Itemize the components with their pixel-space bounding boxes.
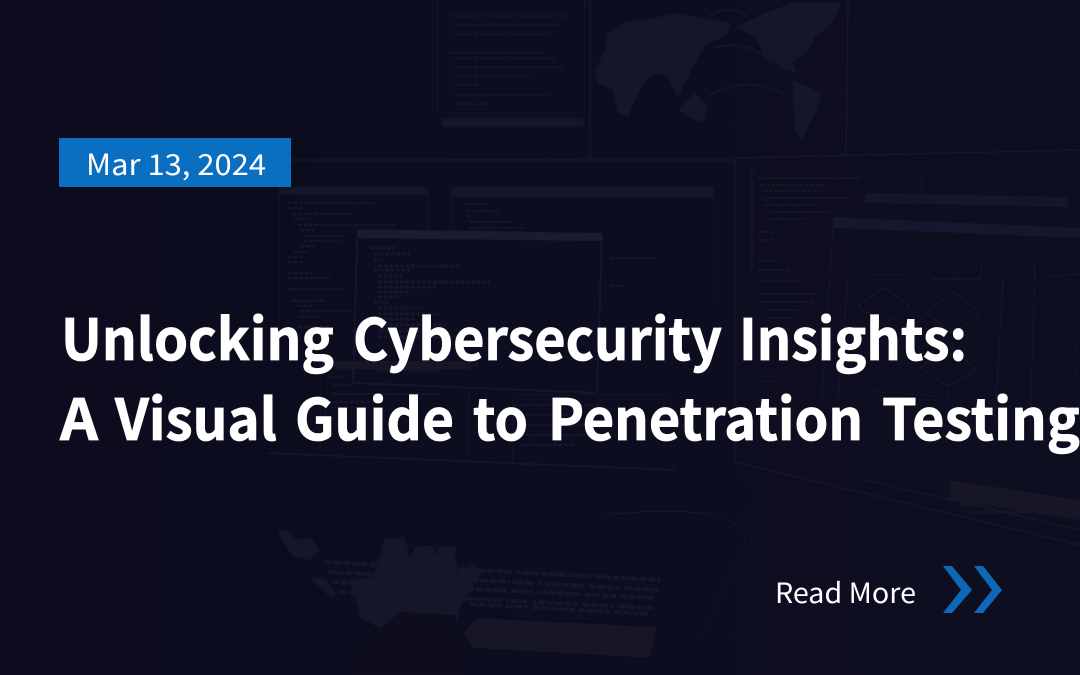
left code window (279, 187, 428, 340)
title: Insights: (739, 295, 967, 377)
person silhouette (0, 49, 260, 470)
title: Unlocking (61, 295, 334, 377)
title: A (59, 375, 98, 457)
icon: double chevron arrow (943, 566, 1002, 613)
title: Testing (882, 375, 1080, 457)
title: to (473, 375, 528, 457)
date badge (59, 138, 291, 187)
stand and tablet (360, 485, 745, 640)
date text: Mar 13, 2024 (86, 142, 266, 184)
keyboard (320, 552, 670, 658)
title: Penetration (548, 375, 863, 457)
top code panel (437, 0, 585, 115)
title: Cybersecurity (353, 295, 722, 377)
world map (595, 3, 842, 140)
title: Guide (295, 375, 454, 457)
lower right window (950, 480, 1080, 520)
flowchart window (822, 217, 1080, 430)
center code window (353, 229, 602, 393)
world map panel (590, 0, 848, 160)
upper code window (451, 187, 714, 300)
typing hand (277, 530, 483, 630)
lower code windows (320, 361, 665, 470)
read more link: Read More (775, 572, 916, 612)
main monitor frame (268, 160, 735, 470)
title (59, 295, 1080, 457)
title: Visual (114, 375, 277, 457)
status bar chart (442, 118, 584, 160)
right monitor and code (735, 150, 1080, 545)
